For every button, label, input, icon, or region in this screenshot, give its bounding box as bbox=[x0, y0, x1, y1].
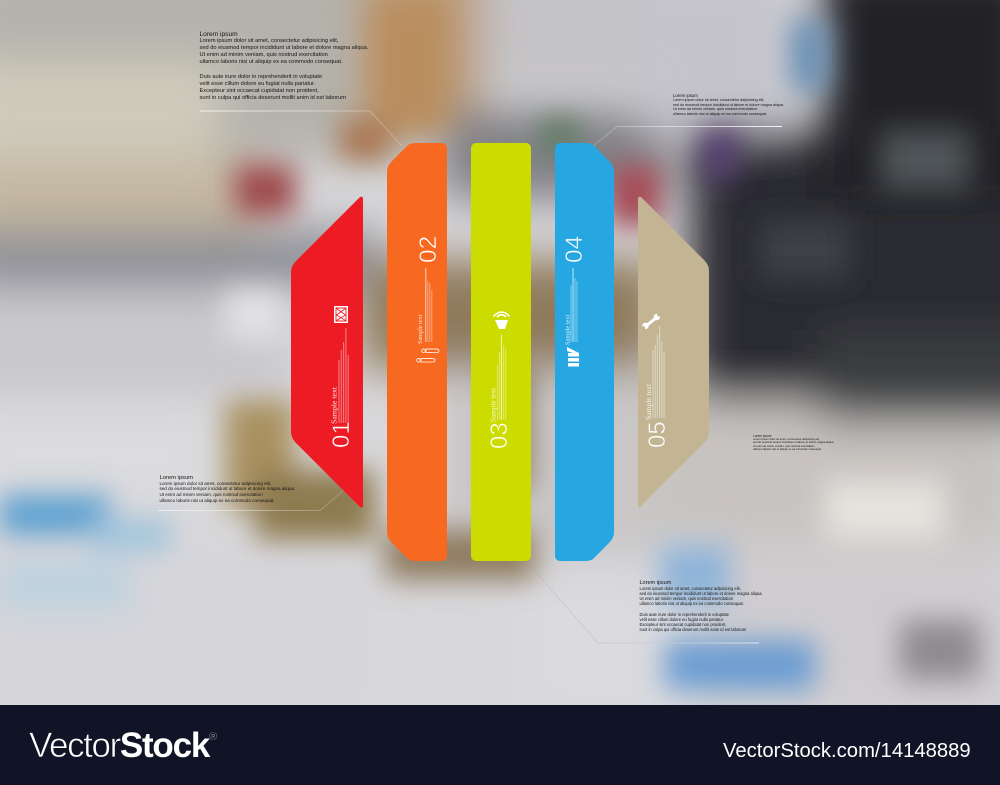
bar 02 body text bbox=[426, 268, 432, 342]
note: bottom right bbox=[640, 580, 763, 632]
note: top left: sed do eiusmod tempor incididunt ut labore et dolore magna aliqua. bbox=[200, 45, 368, 51]
note: top left bbox=[200, 30, 368, 101]
note: bottom right: ullamco laboris nisi ut aliquip ex ea commodo consequat. bbox=[640, 601, 744, 606]
note: bottom right: Ut enim ad minim veniam, quis nostrud exercitation bbox=[640, 596, 733, 601]
note: top right: Ut enim ad minim veniam, quis nostrud exercitation bbox=[673, 107, 757, 111]
connector: note 1 to orange bar bbox=[200, 111, 402, 146]
icon: signal cone bbox=[494, 312, 510, 329]
note: bottom right: sed do eiusmod tempor incididunt ut labore et dolore magna aliqua. bbox=[640, 591, 763, 596]
connector: note 2 to blue bar bbox=[592, 126, 782, 147]
note: top left: Duis aute irure dolor in reprehenderit in voluptate bbox=[200, 74, 322, 80]
note: bottom right: Lorem ipsum bbox=[640, 580, 671, 586]
note: lower left: Lorem ipsum bbox=[160, 474, 193, 480]
bar 05 body text bbox=[653, 326, 664, 418]
note: top left: Excepteur sint occaecat cupidatat non proident, bbox=[200, 88, 319, 94]
note: top right: Lorem ipsum dolor sit amet, consectetur adipisicing elit, bbox=[673, 98, 764, 102]
note: lower left: Lorem ipsum dolor sit amet, consectetur adipisicing elit, bbox=[160, 480, 271, 486]
note: top right: Lorem ipsum bbox=[673, 93, 698, 98]
bar 01 body text bbox=[339, 328, 348, 423]
footer image id: VectorStock.com/14148889 bbox=[723, 740, 971, 762]
note: top left: velit esse cillum dolore eu fugiat nulla pariatur. bbox=[200, 81, 315, 87]
number 04: 04 bbox=[561, 236, 588, 263]
bar 01: red bbox=[291, 197, 363, 508]
note: bottom right: sunt in culpa qui officia deserunt mollit anim id est laborum bbox=[640, 627, 746, 632]
connector: note 5 to green bar bbox=[526, 561, 759, 643]
bar 01 sample text: Sample text bbox=[330, 386, 338, 424]
bar 05 sample text: Sample text bbox=[644, 383, 653, 420]
note: right small: Lorem ipsum bbox=[753, 434, 771, 438]
bar 03 body text bbox=[498, 335, 506, 420]
note: lower left bbox=[160, 474, 295, 503]
note: lower left: Ut enim ad minim veniam, quis nostrud exercitation bbox=[160, 492, 263, 497]
bar 03: yellow-green bbox=[471, 143, 531, 561]
icon: people bbox=[417, 349, 439, 362]
number 01: 01 bbox=[328, 421, 355, 448]
bar 02 sample text: Sample text bbox=[417, 314, 424, 344]
note: right small: Ut enim ad minim veniam, quis nostrud exercitation bbox=[753, 445, 815, 448]
note: top left: Ut enim ad minim veniam, quis nostrud exercitation bbox=[200, 52, 328, 58]
note: top left: Lorem ipsum bbox=[200, 30, 238, 38]
number 02: 02 bbox=[415, 236, 442, 263]
bar 05: tan bbox=[638, 197, 709, 507]
icon: bars chart bbox=[567, 347, 579, 366]
footer logo: VectorStock® bbox=[29, 726, 217, 765]
note: right small: sed do eiusmod tempor incididunt ut labore et dolore magna aliqua. bbox=[753, 441, 834, 444]
note: top left: ullamco laboris nisi ut aliquip ex ea commodo consequat. bbox=[200, 59, 343, 65]
icon: envelope bbox=[334, 306, 348, 323]
note: lower left: ullamco laboris nisi ut aliquip ex ea commodo consequat. bbox=[160, 498, 274, 503]
note: right small bbox=[753, 434, 834, 451]
note: right small: Lorem ipsum dolor sit amet, consectetur adipisicing elit, bbox=[753, 438, 820, 441]
note: right small: ullamco laboris nisi ut aliquip ex ea commodo consequat. bbox=[753, 448, 822, 451]
note: top right bbox=[673, 93, 784, 116]
bar 04 body text bbox=[571, 268, 577, 342]
icon: wrench bbox=[642, 313, 660, 330]
bar 03 sample text: Sample text bbox=[490, 388, 498, 422]
note: lower left: sed do eiusmod tempor incididunt ut labore et dolore magna aliqua. bbox=[160, 486, 295, 491]
number 03: 03 bbox=[486, 422, 513, 449]
bar 04: blue bbox=[555, 143, 614, 561]
note: bottom right: velit esse cillum dolore eu fugiat nulla pariatur. bbox=[640, 617, 724, 622]
note: top left: sunt in culpa qui officia deserunt mollit anim id est laborum bbox=[200, 95, 346, 101]
bar 04 sample text: Sample text bbox=[564, 314, 572, 345]
note: top right: ullamco laboris nisi ut aliquip ex ea commodo consequat. bbox=[673, 112, 767, 116]
note: bottom right: Lorem ipsum dolor sit amet, consectetur adipisicing elit, bbox=[640, 586, 741, 591]
bar 02: orange bbox=[387, 143, 447, 561]
note: top left: Lorem ipsum dolor sit amet, consectetur adipisicing elit, bbox=[200, 38, 338, 44]
footer band bbox=[0, 705, 1000, 785]
note: top right: sed do eiusmod tempor incididunt ut labore et dolore magna aliqua. bbox=[673, 103, 784, 107]
note: bottom right: Duis aute irure dolor in reprehenderit in voluptate bbox=[640, 612, 729, 617]
note: bottom right: Excepteur sint occaecat cupidatat non proident, bbox=[640, 622, 726, 627]
connector: note 3 to red bar bbox=[158, 489, 345, 510]
number 05: 05 bbox=[644, 421, 671, 448]
